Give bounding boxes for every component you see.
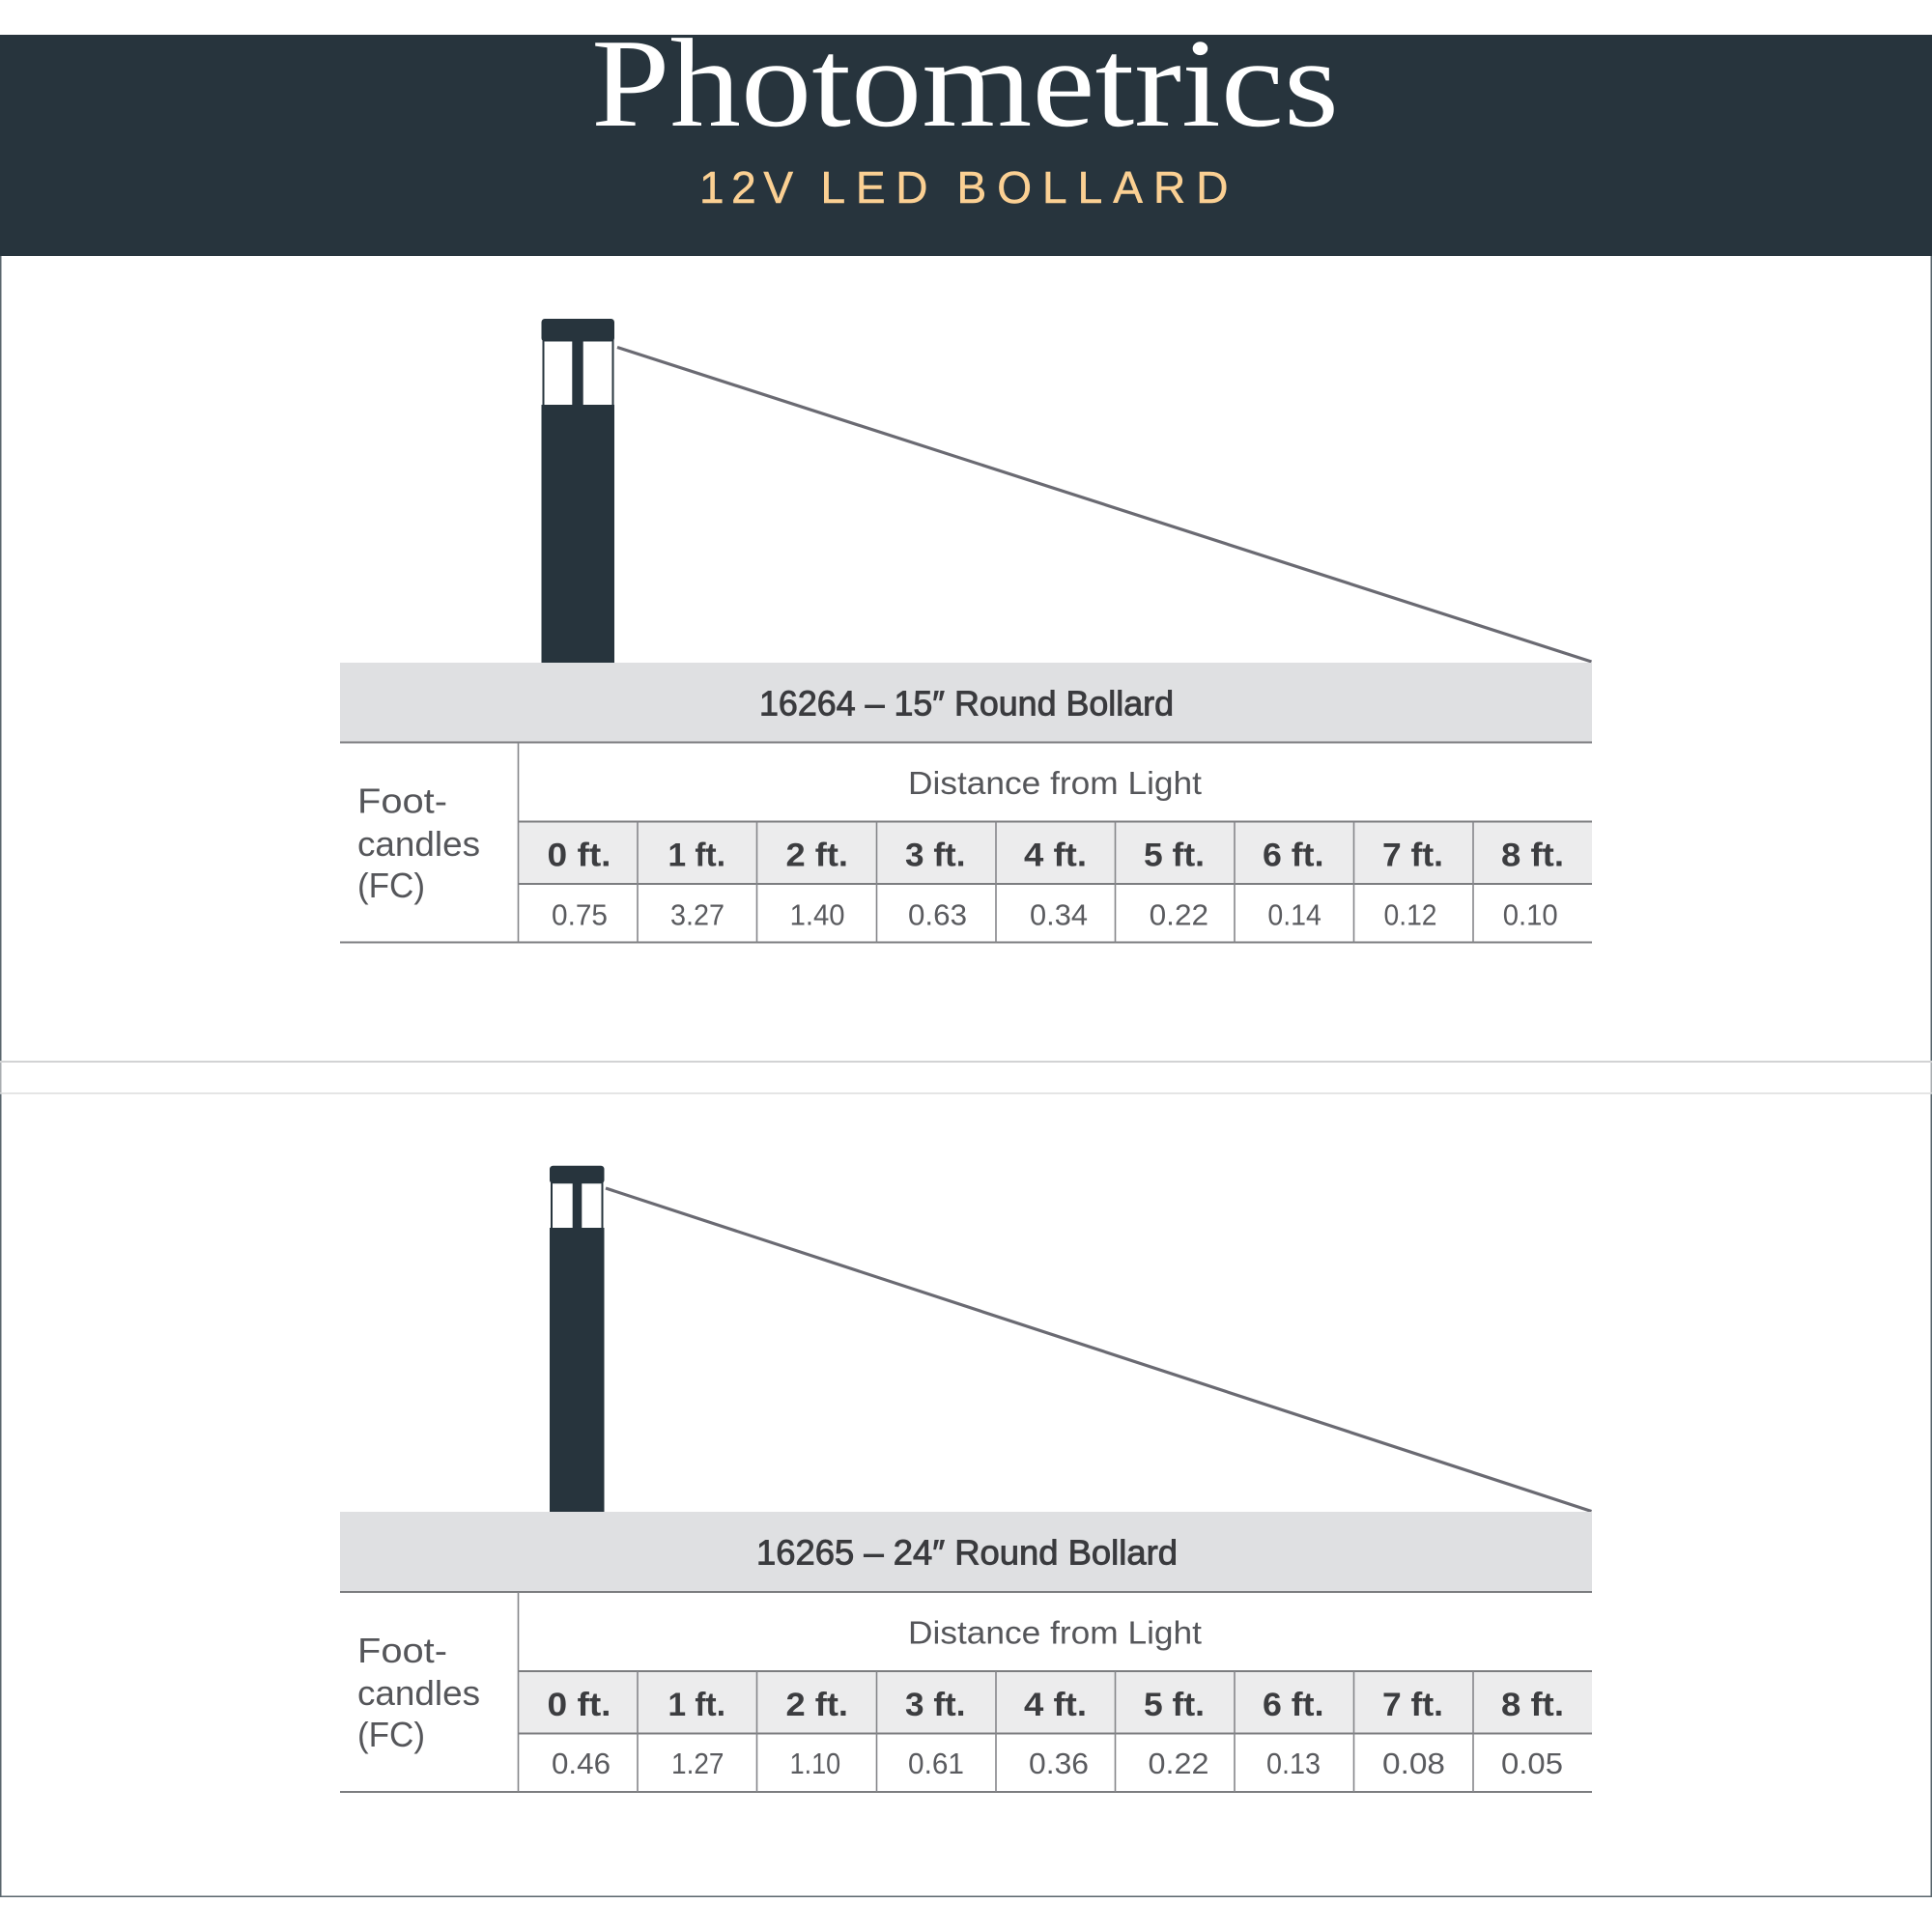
distance headers: 4 ft. bbox=[1024, 1687, 1087, 1723]
header row background bbox=[518, 1671, 1592, 1733]
foot-candle values: 0.05 bbox=[1501, 1747, 1563, 1780]
distance headers: 7 ft. bbox=[1382, 838, 1443, 874]
distance headers: 6 ft. bbox=[1263, 1687, 1323, 1723]
distance headers: 8 ft. bbox=[1501, 838, 1564, 874]
header row background bbox=[518, 821, 1592, 884]
table grid bbox=[340, 742, 1592, 943]
table grid bbox=[340, 1592, 1592, 1792]
distance headers: 2 ft. bbox=[786, 1687, 848, 1723]
distance headers: 6 ft. bbox=[1263, 838, 1323, 874]
distance headers: 8 ft. bbox=[1501, 1687, 1564, 1723]
column group heading: Distance from Light bbox=[908, 765, 1202, 801]
foot-candle values: 0.14 bbox=[1267, 897, 1321, 931]
row label bbox=[357, 1631, 480, 1754]
distance headers: 0 ft. bbox=[547, 838, 611, 874]
foot-candle values: 0.34 bbox=[1030, 897, 1088, 931]
icon: 15 inch bollard bbox=[541, 319, 614, 663]
row label bbox=[357, 781, 480, 905]
foot-candle values bbox=[552, 897, 1558, 931]
section divider bbox=[0, 1061, 1932, 1094]
table heading band bbox=[340, 663, 1592, 742]
foot-candle values: 0.36 bbox=[1029, 1747, 1089, 1780]
foot-candle values: 1.10 bbox=[790, 1747, 840, 1780]
foot-candle values: 0.10 bbox=[1503, 897, 1558, 931]
distance headers: 0 ft. bbox=[547, 1687, 611, 1723]
table heading band: 16265 – 24″ Round Bollard bbox=[756, 1532, 1178, 1572]
subtitle bbox=[699, 162, 1229, 213]
foot-candle values: 0.46 bbox=[552, 1747, 611, 1780]
row label: Foot- bbox=[357, 1631, 447, 1670]
distance headers: 1 ft. bbox=[668, 838, 725, 874]
distance headers: 3 ft. bbox=[905, 1687, 966, 1723]
distance headers: 5 ft. bbox=[1144, 1687, 1205, 1723]
foot-candle values bbox=[552, 1747, 1563, 1780]
distance headers: 7 ft. bbox=[1382, 1687, 1443, 1723]
icon: 24 inch bollard bbox=[550, 1166, 605, 1512]
panel: 16265 24 inch bollard bbox=[340, 1166, 1592, 1792]
foot-candle values: 1.27 bbox=[671, 1747, 724, 1780]
foot-candle values: 0.61 bbox=[908, 1747, 964, 1780]
distance headers: 4 ft. bbox=[1024, 838, 1087, 874]
distance headers bbox=[547, 838, 1564, 874]
light ray line bbox=[606, 1188, 1592, 1511]
title: Photometrics bbox=[591, 14, 1339, 154]
row label: Foot- bbox=[357, 781, 447, 821]
table heading band bbox=[340, 1512, 1592, 1592]
foot-candle values: 0.08 bbox=[1382, 1747, 1445, 1780]
distance headers: 5 ft. bbox=[1144, 838, 1205, 874]
panel: 16264 15 inch bollard bbox=[340, 319, 1592, 943]
foot-candle values: 0.12 bbox=[1383, 897, 1437, 931]
subtitle: LED bbox=[821, 162, 927, 213]
foot-candle values: 0.13 bbox=[1266, 1747, 1321, 1780]
distance headers: 3 ft. bbox=[905, 838, 966, 874]
foot-candle values: 0.22 bbox=[1150, 897, 1208, 931]
foot-candle values: 3.27 bbox=[670, 897, 724, 931]
table heading band: 16264 – 15″ Round Bollard bbox=[759, 684, 1174, 724]
header band bbox=[0, 14, 1932, 256]
foot-candle values: 0.75 bbox=[552, 897, 608, 931]
distance headers: 1 ft. bbox=[668, 1687, 725, 1723]
distance headers bbox=[547, 1687, 1564, 1723]
foot-candle values: 1.40 bbox=[790, 897, 845, 931]
light ray line bbox=[617, 348, 1592, 662]
column group heading: Distance from Light bbox=[908, 1615, 1202, 1650]
row label: (FC) bbox=[357, 866, 425, 905]
foot-candle values: 0.22 bbox=[1148, 1747, 1209, 1780]
row label: (FC) bbox=[357, 1715, 425, 1754]
row label: candles bbox=[357, 1673, 480, 1713]
subtitle: BOLLARD bbox=[956, 162, 1229, 213]
subtitle: 12V bbox=[699, 162, 793, 213]
foot-candle values: 0.63 bbox=[908, 897, 967, 931]
distance headers: 2 ft. bbox=[786, 838, 848, 874]
row label: candles bbox=[357, 824, 480, 864]
